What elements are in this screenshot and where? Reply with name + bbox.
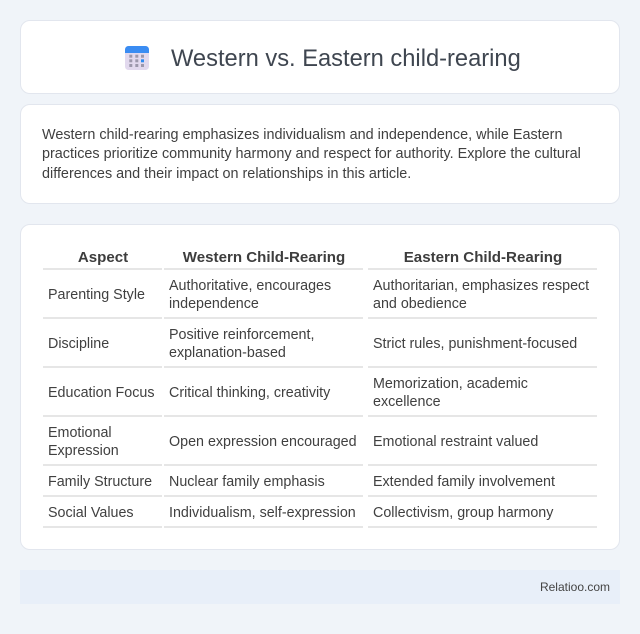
row: parenting style: and obedience bbox=[373, 296, 467, 312]
row: education focus: excellence bbox=[373, 394, 441, 410]
row: emotional expression bbox=[48, 425, 538, 459]
table header: Western Child-Rearing bbox=[183, 249, 345, 266]
row: education focus: Memorization, academic bbox=[373, 376, 528, 392]
row: emotional expression: Emotional restraint valued bbox=[373, 434, 538, 450]
icon: calendar bbox=[125, 46, 149, 70]
row: discipline: explanation-based bbox=[169, 345, 286, 361]
row: parenting style bbox=[48, 278, 589, 312]
panel: comparison table bbox=[20, 224, 620, 550]
row: social values: Social Values bbox=[48, 505, 134, 521]
intro text: practices prioritize community harmony and respect for authority. Explore the cultural bbox=[42, 146, 581, 162]
row: discipline bbox=[48, 327, 577, 361]
row: education focus bbox=[48, 376, 528, 410]
row: family structure: Extended family involvement bbox=[373, 474, 555, 490]
footer text: Relatioo.com bbox=[540, 580, 610, 594]
panel: title card bbox=[20, 20, 620, 94]
row: emotional expression: Open expression encouraged bbox=[169, 434, 357, 450]
intro text: differences and their impact on relationships in this article. bbox=[42, 166, 411, 182]
row: parenting style: Parenting Style bbox=[48, 287, 145, 303]
row: parenting style: Authoritarian, emphasizes respect bbox=[373, 278, 589, 294]
row: discipline: Positive reinforcement, bbox=[169, 327, 314, 343]
row: social values bbox=[48, 505, 554, 521]
row: family structure bbox=[48, 474, 555, 490]
panel: introduction bbox=[20, 104, 620, 204]
intro text: Western child-rearing emphasizes individualism and independence, while Eastern bbox=[42, 126, 562, 142]
row: education focus: Education Focus bbox=[48, 385, 154, 401]
row: emotional expression: Expression bbox=[48, 443, 119, 459]
row: emotional expression: Emotional bbox=[48, 425, 112, 441]
table header: Aspect bbox=[78, 249, 128, 266]
row: parenting style: independence bbox=[169, 296, 259, 312]
row: discipline: Discipline bbox=[48, 336, 109, 352]
row: social values: Collectivism, group harmony bbox=[373, 505, 553, 521]
table header: Eastern Child-Rearing bbox=[404, 249, 562, 266]
table header bbox=[78, 249, 562, 266]
row: social values: Individualism, self-expression bbox=[169, 505, 356, 521]
intro text bbox=[42, 126, 581, 182]
footer bar bbox=[20, 570, 620, 604]
row: discipline: Strict rules, punishment-focused bbox=[373, 336, 577, 352]
row: family structure: Nuclear family emphasis bbox=[169, 474, 325, 490]
row: education focus: Critical thinking, creativity bbox=[169, 385, 330, 401]
title: Western vs. Eastern child-rearing bbox=[171, 46, 521, 72]
row: parenting style: Authoritative, encourages bbox=[169, 278, 331, 294]
row: family structure: Family Structure bbox=[48, 474, 152, 490]
